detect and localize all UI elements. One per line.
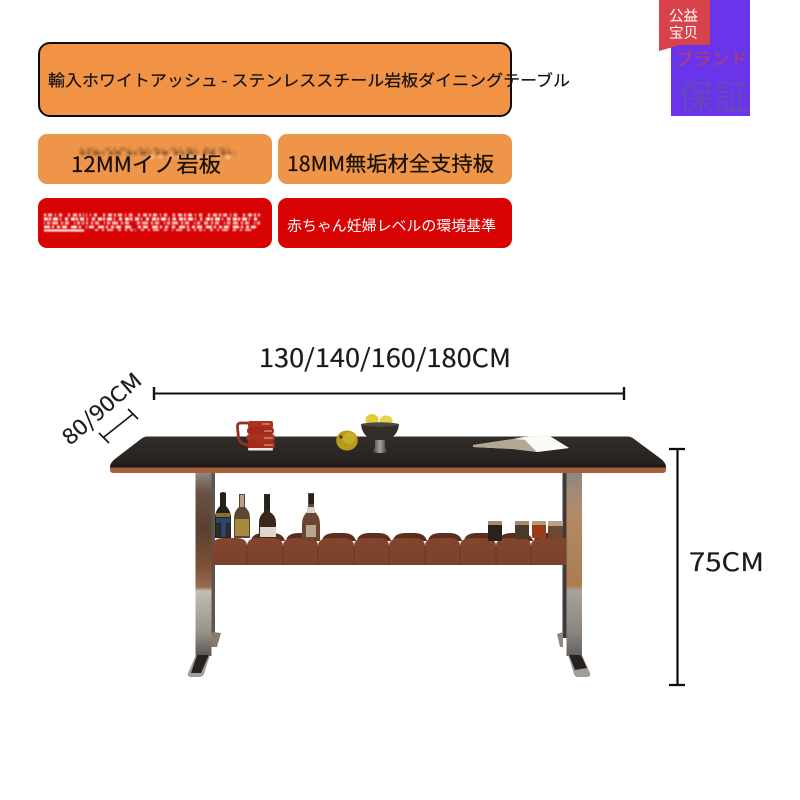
bottles	[215, 492, 320, 540]
shelf: scalloped wood rack	[212, 533, 566, 565]
title banner	[39, 43, 570, 116]
depth label: 80/90CM	[55, 365, 148, 451]
badge text: 12MMイノ岩板	[71, 149, 221, 179]
open book	[473, 435, 569, 452]
badge text: 赤ちゃん妊婦レベルの環境基準	[287, 215, 496, 236]
depth dimension arrow	[99, 409, 138, 443]
brand text: ブランド	[675, 45, 748, 70]
front legs	[188, 473, 590, 677]
badge text: 18MM無垢材全支持板	[287, 147, 494, 177]
height dimension arrow	[669, 449, 685, 685]
title text: 輸入ホワイトアッシュ - ステンレススチール岩板ダイニングテーブル	[48, 67, 570, 91]
charity ribbon: 宝贝	[669, 22, 698, 43]
charity ribbon	[659, 0, 710, 51]
spice jars	[488, 521, 563, 541]
guarantee text: 保証	[678, 70, 750, 121]
feature badge: 18MM solid wood	[278, 134, 512, 184]
feature badge: garbled red label	[38, 198, 272, 248]
width dimension arrow	[154, 387, 624, 400]
brand guarantee block	[671, 0, 750, 121]
ribbon text: 公益	[669, 5, 698, 26]
mug	[237, 421, 275, 450]
table top with walnut edge	[110, 436, 666, 473]
width label: 130/140/160/180CM	[259, 339, 511, 375]
back legs	[211, 473, 566, 647]
feature badge: environmental standard	[278, 198, 512, 248]
feature badge: 12MM slab	[38, 134, 272, 184]
pear	[336, 430, 358, 450]
table illustration	[110, 414, 666, 677]
fruit bowl	[361, 414, 399, 453]
height label: 75CM	[689, 543, 764, 579]
